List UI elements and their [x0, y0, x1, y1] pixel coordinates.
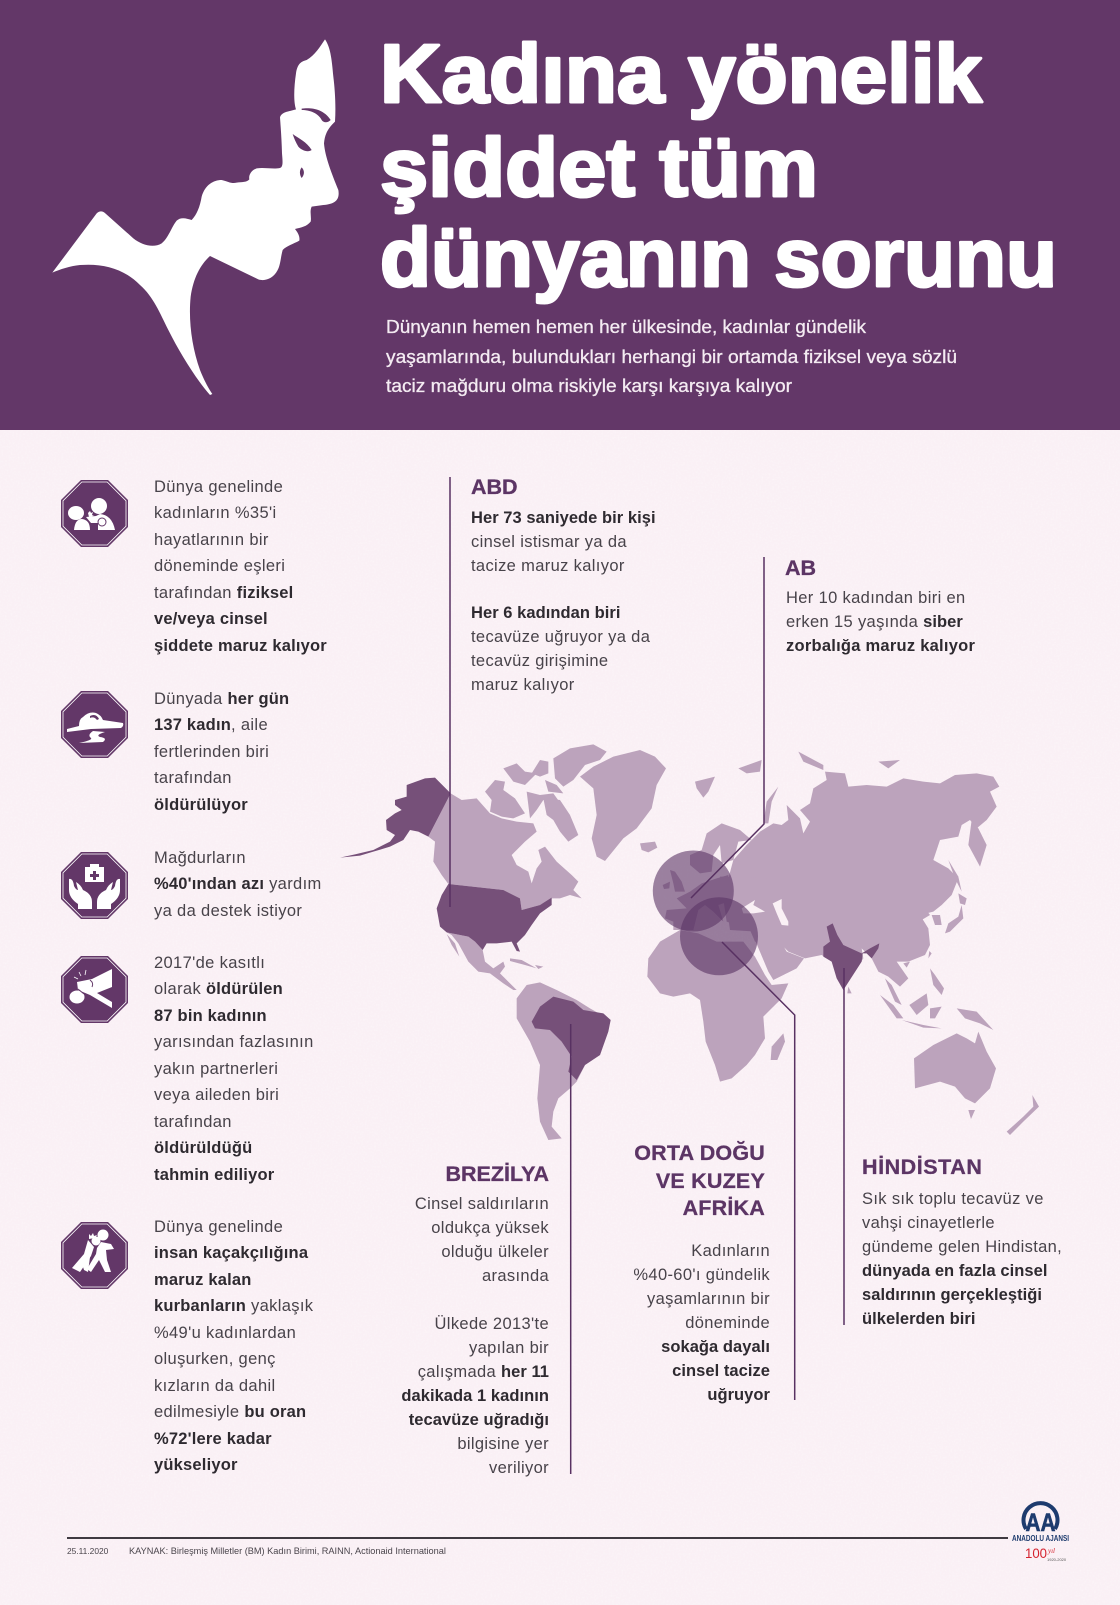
text: statistic 5: yükseliyor	[154, 1456, 238, 1474]
title: şiddet tüm	[380, 121, 818, 214]
footer date: 25.11.2020	[67, 1546, 108, 1556]
text: Hindistan: Sık sık toplu tecavüz ve	[862, 1190, 1044, 1208]
heading: Orta Doğu ve Kuzey Afrika: ORTA DOĞU	[634, 1141, 765, 1165]
text: statistic 4: 2017'de kasıtlı	[154, 954, 265, 972]
text: Brezilya: dakikada 1 kadının	[401, 1387, 549, 1405]
heading: ABD: ABD	[471, 475, 518, 499]
icon: murdered woman	[61, 956, 128, 1023]
text: Brezilya: Ülkede 2013'te	[435, 1315, 549, 1333]
text: Orta Doğu ve Kuzey Afrika	[633, 1242, 770, 1404]
text: statistic 5: %49'u kadınlardan	[154, 1324, 296, 1342]
text: statistic 2: 137 kadın, aile	[154, 716, 268, 734]
text: Brezilya	[401, 1195, 549, 1477]
text: AB	[786, 589, 975, 655]
text: Brezilya: bilgisine yer	[457, 1435, 549, 1453]
text: statistic 4: 87 bin kadının	[154, 1007, 267, 1025]
footer source: KAYNAK: Birleşmiş Milletler (BM) Kadın Birimi, RAINN, Actionaid International	[129, 1546, 446, 1556]
text: ABD: Her 73 saniyede bir kişi	[471, 509, 656, 527]
text: ABD: cinsel istismar ya da	[471, 533, 627, 551]
text: statistic 2	[154, 690, 289, 814]
text: Orta Doğu ve Kuzey Afrika: yaşamlarının bir	[647, 1290, 770, 1308]
text: Orta Doğu ve Kuzey Afrika: Kadınların	[691, 1242, 770, 1260]
text: statistic 1	[154, 478, 327, 655]
text: Brezilya: çalışmada her 11	[418, 1363, 549, 1381]
text: Hindistan: vahşi cinayetlerle	[862, 1214, 995, 1232]
text: statistic 4: yarısından fazlasının	[154, 1033, 314, 1051]
text: Hindistan	[862, 1190, 1062, 1328]
highlight circle: Europe	[653, 850, 734, 932]
text: statistic 5: Dünya genelinde	[154, 1218, 283, 1236]
text: Orta Doğu ve Kuzey Afrika: uğruyor	[707, 1386, 770, 1404]
highlight circle: Middle East and North Africa	[680, 897, 758, 975]
text: statistic 3	[154, 849, 322, 920]
text: Orta Doğu ve Kuzey Afrika: döneminde	[685, 1314, 770, 1332]
text: ABD: maruz kalıyor	[471, 676, 575, 694]
text: statistic 2: fertlerinden biri	[154, 743, 269, 761]
text: Brezilya: arasında	[482, 1267, 549, 1285]
text: statistic 3: %40'ından azı yardım	[154, 875, 322, 893]
header panel	[0, 0, 1120, 430]
text: Orta Doğu ve Kuzey Afrika: cinsel tacize	[672, 1362, 770, 1380]
heading: Orta Doğu ve Kuzey Afrika: AFRİKA	[683, 1196, 765, 1220]
title: dünyanın sorunu	[380, 211, 1057, 304]
text: statistic 4: tarafından	[154, 1113, 232, 1131]
text: ABD	[471, 509, 656, 694]
text: statistic 1: ve/veya cinsel	[154, 610, 268, 628]
heading: Orta Doğu ve Kuzey Afrika	[634, 1140, 765, 1220]
text: statistic 2: tarafından	[154, 769, 232, 787]
subtitle: taciz mağduru olma riskiyle karşı karşıya kalıyor	[386, 376, 792, 396]
subtitle: Dünyanın hemen hemen her ülkesinde, kadınlar gündelik	[386, 317, 867, 337]
text: Brezilya: oldukça yüksek	[431, 1219, 549, 1237]
text: statistic 5: edilmesiyle bu oran	[154, 1403, 306, 1421]
text: statistic 1: Dünya genelinde	[154, 478, 283, 496]
text: statistic 4: veya aileden biri	[154, 1086, 279, 1104]
text: statistic 5	[154, 1218, 313, 1474]
logo: Anadolu Ajansı: 100	[1025, 1545, 1047, 1561]
icon: female face silhouette	[52, 40, 339, 395]
text: statistic 2: öldürülüyor	[154, 796, 248, 814]
logo: Anadolu Ajansı: yıl	[1047, 1547, 1055, 1555]
text: statistic 2: Dünyada her gün	[154, 690, 289, 708]
text: statistic 3: ya da destek istiyor	[154, 902, 302, 920]
text: Brezilya: olduğu ülkeler	[441, 1243, 549, 1261]
text: statistic 5: kurbanların yaklaşık	[154, 1297, 313, 1315]
text: statistic 4: yakın partnerleri	[154, 1060, 278, 1078]
text: ABD: Her 6 kadından biri	[471, 604, 620, 622]
title	[380, 27, 1057, 304]
text: AB: Her 10 kadından biri en	[786, 589, 966, 607]
heading: Brezilya: BREZİLYA	[445, 1162, 549, 1186]
text: ABD: tecavüze uğruyor ya da	[471, 628, 650, 646]
text: statistic 3: Mağdurların	[154, 849, 246, 867]
text: statistic 4: tahmin ediliyor	[154, 1166, 274, 1184]
subtitle: yaşamlarında, bulundukları herhangi bir ortamda fiziksel veya sözlü	[386, 347, 957, 367]
text: Hindistan: saldırının gerçekleştiği	[862, 1286, 1042, 1304]
text: statistic 4: öldürüldüğü	[154, 1139, 252, 1157]
background speckle	[0, 430, 1120, 1605]
logo: Anadolu Ajansı: AA	[1026, 1509, 1056, 1537]
text: statistic 5: maruz kalan	[154, 1271, 252, 1289]
text: ABD: tacize maruz kalıyor	[471, 557, 625, 575]
text: statistic 4	[154, 954, 314, 1184]
text: Hindistan: gündeme gelen Hindistan,	[862, 1238, 1062, 1256]
text: AB: erken 15 yaşında siber	[786, 613, 963, 631]
text: statistic 4: olarak öldürülen	[154, 980, 283, 998]
map: Europe, Africa, Asia, Oceania	[647, 752, 1039, 1135]
icon: lying victim	[61, 691, 128, 758]
heading: AB: AB	[785, 556, 816, 580]
icon: hands and first aid kit	[61, 852, 128, 919]
text: statistic 5: kızların da dahil	[154, 1377, 276, 1395]
logo: Anadolu Ajansı	[1012, 1501, 1069, 1562]
text: statistic 5: insan kaçakçılığına	[154, 1244, 308, 1262]
text: ABD: tecavüz girişimine	[471, 652, 608, 670]
map: Americas	[340, 744, 666, 1140]
icon: partner violence	[61, 480, 128, 547]
text: statistic 1: döneminde eşleri	[154, 557, 285, 575]
text: Hindistan: dünyada en fazla cinsel	[862, 1262, 1047, 1280]
text: statistic 1: tarafından fiziksel	[154, 584, 293, 602]
text: statistic 1: şiddete maruz kalıyor	[154, 637, 327, 655]
text: statistic 5: %72'lere kadar	[154, 1430, 272, 1448]
subtitle	[386, 317, 957, 396]
icon: human trafficking	[61, 1222, 128, 1289]
title: Kadına yönelik	[380, 27, 983, 120]
heading: Hindistan: HİNDİSTAN	[862, 1155, 982, 1179]
text: Orta Doğu ve Kuzey Afrika: %40-60'ı gündelik	[633, 1266, 770, 1284]
logo: Anadolu Ajansı: 1920-2020	[1047, 1557, 1067, 1562]
text: Brezilya: veriliyor	[489, 1459, 549, 1477]
heading: Orta Doğu ve Kuzey Afrika: VE KUZEY	[656, 1168, 765, 1192]
footer rule	[67, 1537, 1008, 1539]
text: Brezilya: Cinsel saldırıların	[415, 1195, 549, 1213]
text: Brezilya: yapılan bir	[469, 1339, 549, 1357]
text: statistic 1: kadınların %35'i	[154, 504, 276, 522]
text: Orta Doğu ve Kuzey Afrika: sokağa dayalı	[661, 1338, 770, 1356]
text: AB: zorbalığa maruz kalıyor	[786, 637, 975, 655]
text: statistic 5: oluşurken, genç	[154, 1350, 276, 1368]
text: Brezilya: tecavüze uğradığı	[409, 1411, 549, 1429]
text: Hindistan: ülkelerden biri	[862, 1310, 976, 1328]
text: statistic 1: hayatlarının bir	[154, 531, 269, 549]
